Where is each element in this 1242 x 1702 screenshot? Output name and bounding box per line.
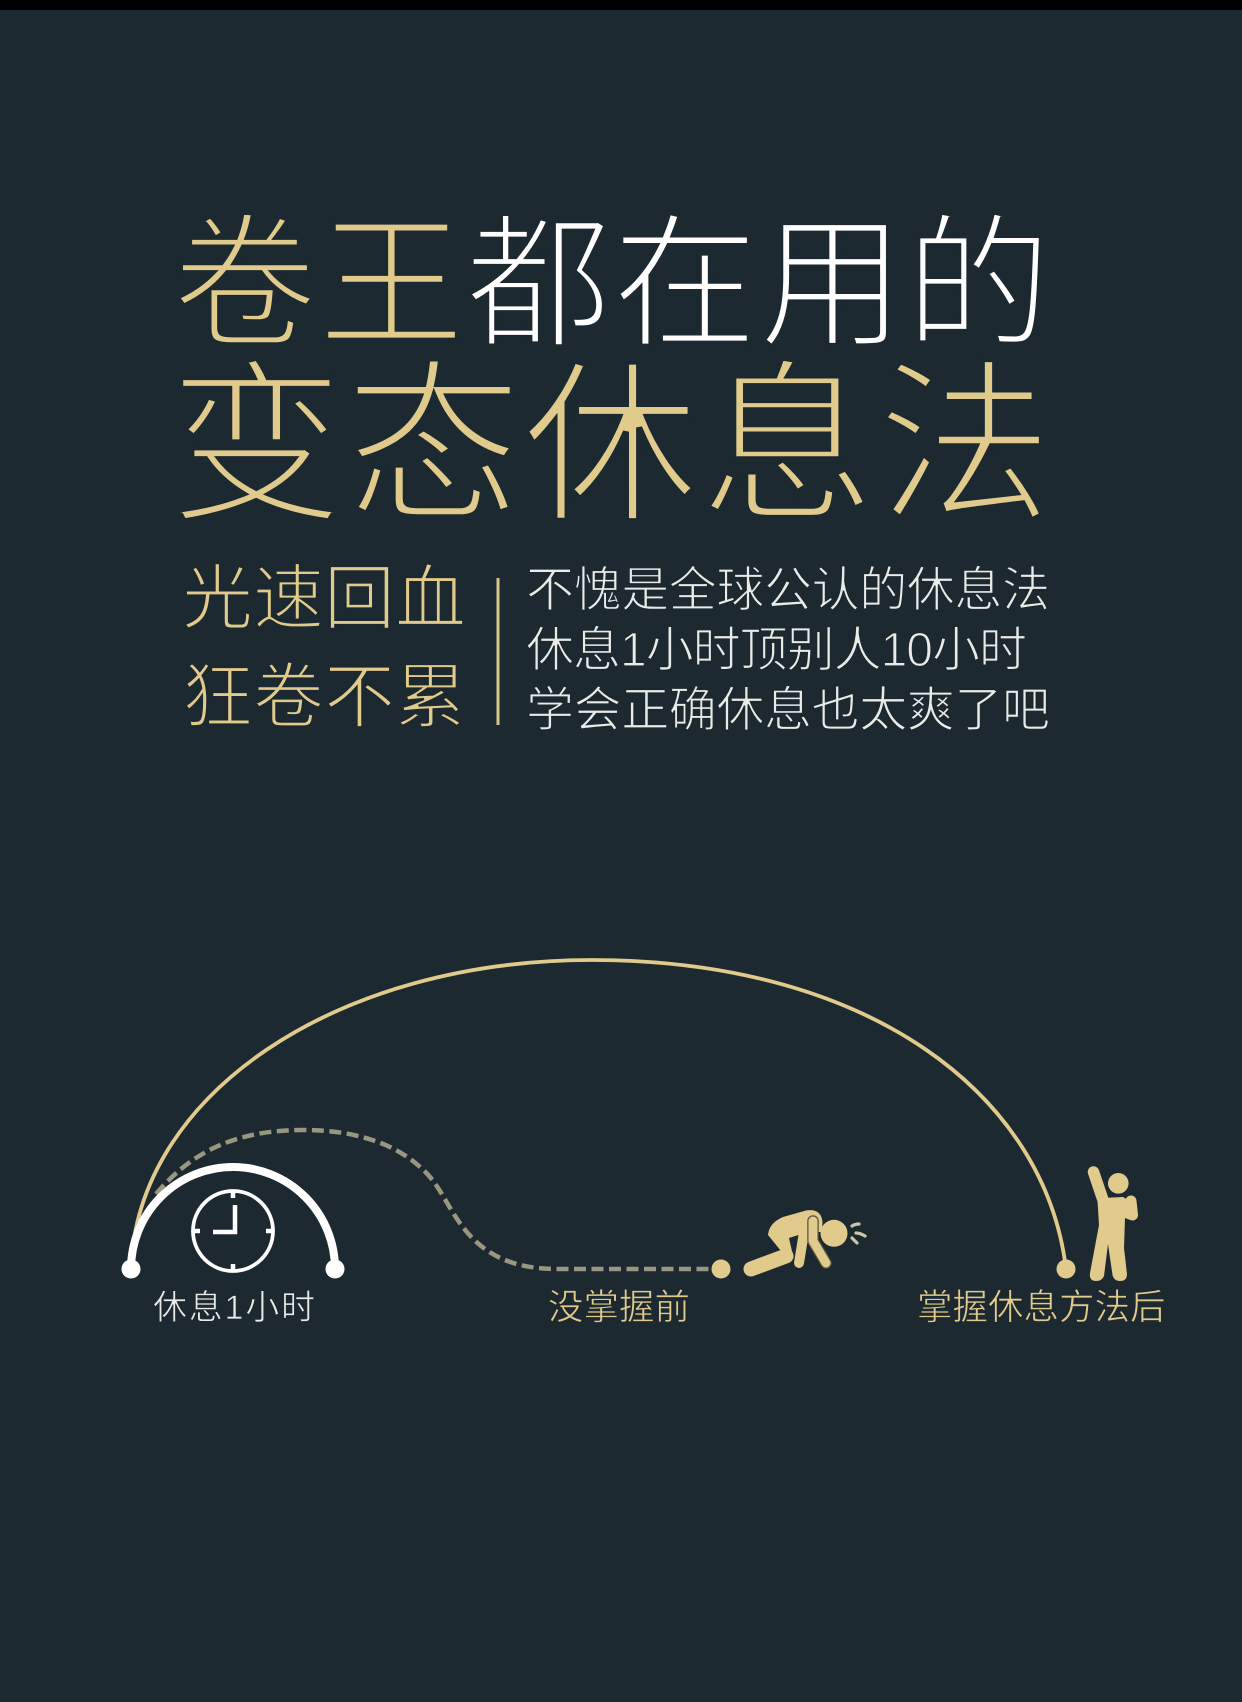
title line 1: 卷王都在用的 xyxy=(171,204,1052,367)
slogan line 2: 狂卷不累 xyxy=(182,658,466,738)
white start dot xyxy=(122,1260,140,1278)
gold arc after mastering xyxy=(131,960,1066,1269)
slogan line 1: 光速回血 xyxy=(182,560,466,639)
gold dot after xyxy=(1056,1260,1076,1278)
icon: clock xyxy=(193,1191,273,1271)
label: before mastering: 没掌握前 xyxy=(548,1287,690,1327)
icon: exhausted crawling person xyxy=(751,1210,865,1269)
icon: energetic standing person xyxy=(1090,1172,1132,1281)
chart: rest efficiency arcs xyxy=(122,960,1076,1278)
description line 3: 学会正确休息也太爽了吧 xyxy=(526,684,1050,737)
description line 1: 不愧是全球公认的休息法 xyxy=(526,564,1050,617)
gold slogan xyxy=(182,560,466,738)
gold dot before xyxy=(712,1260,730,1278)
label: after mastering: 掌握休息方法后 xyxy=(917,1287,1166,1327)
vertical divider xyxy=(496,578,500,725)
white one hour arc xyxy=(131,1167,335,1269)
title xyxy=(168,204,1053,545)
label: rest one hour: 休息1小时 xyxy=(153,1289,315,1327)
description line 2: 休息1小时顶别人10小时 xyxy=(526,624,1027,677)
description text xyxy=(526,564,1050,737)
title line 2: 变态休息法 xyxy=(168,348,1053,545)
dashed path before mastering xyxy=(156,1130,721,1269)
white end dot xyxy=(326,1260,344,1278)
